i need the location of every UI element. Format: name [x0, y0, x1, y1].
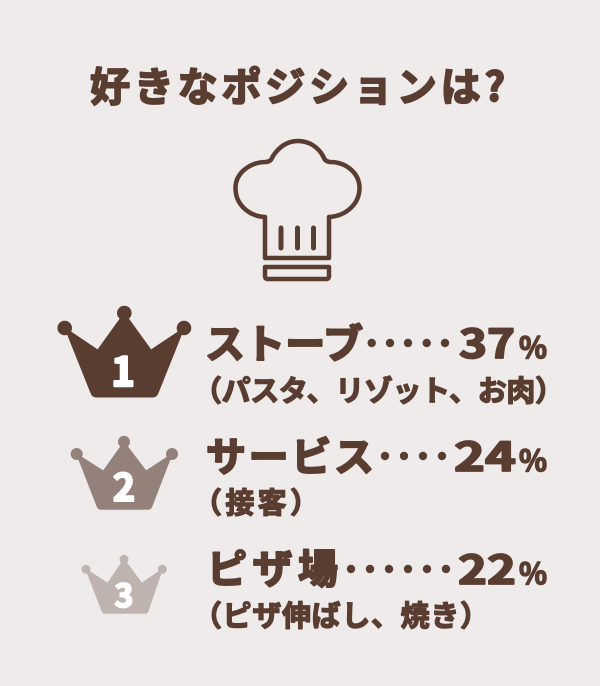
rank 1: ストーブ: [57, 306, 564, 410]
icon: crown 2: [71, 436, 178, 512]
icon: crown 1: [57, 306, 191, 398]
percent sign: %: [519, 551, 547, 593]
icon: crown 2: 2: [113, 457, 135, 512]
value: 37: [459, 312, 515, 370]
sub label: （接客）: [193, 480, 319, 522]
dotted leader: [368, 339, 449, 347]
label: ストーブ: [205, 312, 363, 370]
value: 22: [458, 538, 516, 596]
icon: crown 3: 3: [115, 571, 133, 617]
sub label: （ピザ伸ばし、焼き）: [193, 593, 489, 635]
label: サービス: [206, 425, 374, 483]
value: 24: [454, 425, 516, 483]
icon: crown 3: [82, 555, 167, 617]
dotted leader: [381, 452, 446, 460]
rank 2: サービス: [71, 425, 547, 522]
rank 3: ピザ場: [82, 537, 547, 635]
icon: crown 1: 1: [111, 340, 135, 398]
percent sign: %: [519, 325, 547, 367]
icon: chef hat: [236, 141, 360, 279]
sub label: （パスタ、リゾット、お肉）: [193, 368, 564, 410]
title: 好きなポジションは?: [90, 55, 505, 113]
dotted leader: [347, 565, 450, 573]
label: ピザ場: [207, 537, 338, 595]
percent sign: %: [519, 438, 547, 480]
